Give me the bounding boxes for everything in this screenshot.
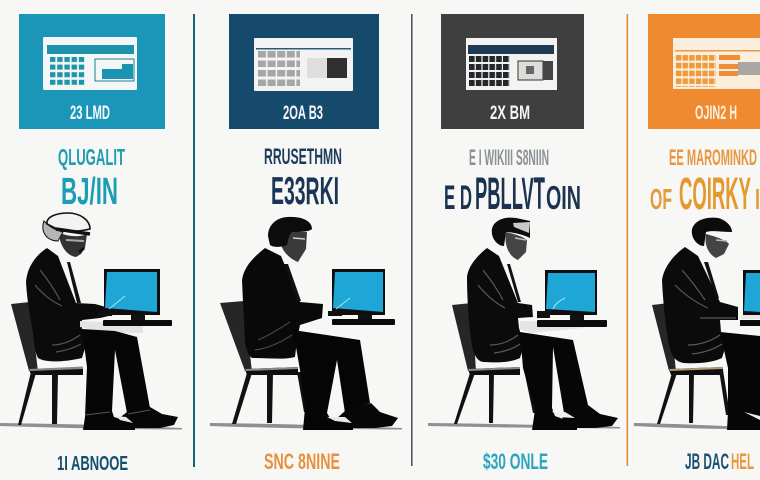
card label: 23 LMD xyxy=(70,103,110,124)
card: orange dashboard xyxy=(648,14,760,129)
figure: seated man with monitor xyxy=(0,213,182,430)
heading line 1: RRUSETHMN xyxy=(264,144,342,169)
card label: 2OA B3 xyxy=(283,103,323,124)
column divider: orange xyxy=(626,14,628,466)
heading line 2: E D xyxy=(444,179,472,217)
panel: column 4 xyxy=(634,14,760,474)
heading line 2 xyxy=(444,168,581,219)
panel: column 1 xyxy=(0,14,182,475)
bottom label: 1I ABNOOE xyxy=(57,453,128,475)
card: teal dashboard xyxy=(19,14,165,129)
panel: column 3: E I WIKIII S8NIIN xyxy=(469,145,549,170)
bottom label: $30 ONLE xyxy=(483,449,548,474)
column divider: grey xyxy=(411,14,413,466)
heading line 1: QLUGALIT xyxy=(58,144,125,170)
figure: seated man with monitor xyxy=(428,218,620,430)
heading line 2: OIN xyxy=(546,179,581,216)
figure: seated man with monitor xyxy=(634,218,760,430)
figure: seated man with monitor xyxy=(210,217,402,430)
heading line 2: BJ/IN xyxy=(61,171,118,213)
panel: column 2: E33RKI xyxy=(271,170,339,213)
panel: column 2 xyxy=(210,14,402,474)
heading line 2: OF xyxy=(650,184,672,216)
panel: column 3 xyxy=(428,14,620,474)
card: navy dashboard xyxy=(229,14,379,129)
column divider: teal xyxy=(193,14,195,467)
heading line 2: PBLLVT xyxy=(475,168,545,219)
card: charcoal dashboard xyxy=(441,14,584,129)
card label: 2X BM xyxy=(490,103,530,124)
bottom label: SNC 8NINE xyxy=(264,449,340,474)
